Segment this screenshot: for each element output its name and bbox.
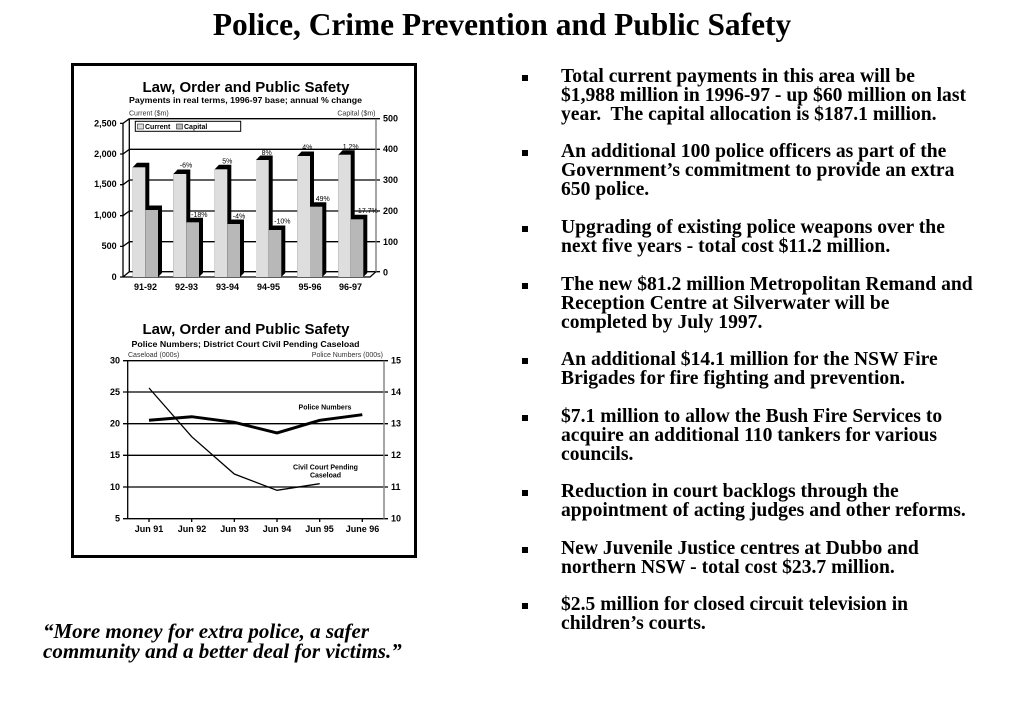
chart heading: Law, Order and Public Safety [142,322,350,338]
date labels: Jun 94 [263,524,291,534]
bullet: police officers: Government’s commitment to provide an extra [561,160,954,181]
bar chart: payments in real terms [94,80,398,292]
right axis labels: 11 [391,482,401,492]
bullet: police weapons [522,217,945,257]
legend: Capital [184,124,207,131]
percent change labels: -17.7% [356,208,378,215]
right axis labels: 300 [383,175,398,185]
left axis labels: 2,500 [94,118,117,128]
bullet: fire brigades [522,349,938,389]
chart heading [132,322,360,349]
year labels: 95-96 [298,282,322,292]
right axis labels: 100 [383,237,398,247]
year labels: 92-93 [175,282,198,292]
chart heading: Payments in real terms, 1996-97 base; annual % change [129,95,362,105]
quote: community and a better deal for victims.” [43,638,402,662]
bullet: current payments: year. The capital allocation is $187.1 million. [561,104,937,125]
left axis labels: 15 [110,450,120,460]
year labels [134,282,362,292]
quote [43,619,402,662]
series labels: Police Numbers [299,404,352,412]
percent change labels: 49% [316,196,330,203]
line: civil court pending caseload [149,388,320,490]
bullet: fire brigades: An additional $14.1 million for the NSW Fire [561,349,938,370]
left axis labels: 1,000 [94,210,117,220]
bullet: bush fire services: $7.1 million to allow the Bush Fire Services to [561,406,942,427]
bars [133,150,367,277]
bullet: juvenile justice [522,538,919,578]
axis titles: Capital ($m) [337,110,376,118]
line chart: police numbers and caseload [110,322,401,534]
line: police numbers [149,415,362,433]
bullet: juvenile justice: New Juvenile Justice centres at Dubbo and [561,538,919,559]
bullet: remand centre: Reception Centre at Silverwater will be [561,293,889,314]
chart heading: Police Numbers; District Court Civil Pending Caseload [132,339,360,349]
right axis labels: 13 [391,419,401,429]
bullet: court backlogs: appointment of acting judges and other reforms. [561,500,966,521]
percent change labels: 1.2% [343,144,359,151]
axis titles: Police Numbers (000s) [312,352,383,359]
legend [135,121,241,131]
chart heading: Law, Order and Public Safety [142,80,350,96]
bullet: closed circuit television: children’s courts. [561,613,706,634]
left axis labels: 20 [110,419,120,429]
bullet: current payments: $1,988 million in 1996-97 - up $60 million on last [561,85,966,106]
year labels: 91-92 [134,282,157,292]
axis titles: Current ($m) [129,110,169,118]
date labels: Jun 93 [220,524,249,534]
bullet: bush fire services: councils. [561,444,633,465]
bullet: bush fire services [522,406,942,465]
series labels: Caseload [310,472,341,480]
left axis labels: 500 [102,241,117,251]
bullet: remand centre [522,274,973,333]
bullet: police officers [522,141,954,200]
percent change labels [180,144,378,226]
bullet: court backlogs [522,481,966,521]
percent change labels: 8% [262,150,272,157]
axis titles [129,110,376,118]
left axis labels: 0 [112,272,117,282]
bullet: juvenile justice: northern NSW - total cost $23.7 million. [561,557,895,578]
bullet: police weapons: next five years - total cost $11.2 million. [561,236,890,257]
percent change labels: -10% [274,219,290,226]
right axis labels: 10 [391,514,401,524]
right axis labels: 0 [383,268,388,278]
plot grid [120,119,380,277]
bullet: remand centre: completed by July 1997. [561,312,762,333]
axis titles [128,352,383,359]
right axis labels: 12 [391,450,401,460]
left axis labels: 10 [110,482,120,492]
right axis labels: 14 [391,387,401,397]
left axis labels [94,118,117,282]
year labels: 96-97 [339,282,362,292]
percent change labels: 5% [222,158,232,165]
year labels: 93-94 [216,282,239,292]
bullet: current payments: Total current payments in this area will be [561,66,915,87]
quote: “More money for extra police, a safer [43,619,369,643]
percent change labels: -4% [233,214,245,221]
percent change labels: -18% [191,212,207,219]
bullet: current payments [522,66,966,125]
axis titles: Caseload (000s) [128,352,179,359]
bullet: closed circuit television [522,594,908,634]
series labels [293,404,358,480]
title: Police, Crime Prevention and Public Safety [213,7,791,42]
left axis labels [110,356,120,524]
left axis labels: 25 [110,387,120,397]
bullet: closed circuit television: $2.5 million for closed circuit television in [561,594,908,615]
date labels: June 96 [346,524,379,534]
left axis labels: 1,500 [94,179,117,189]
right axis labels: 400 [383,144,398,154]
left axis labels: 30 [110,356,120,366]
plot grid and axes [123,361,388,522]
date labels [135,524,379,534]
left axis labels: 2,000 [94,149,117,159]
legend: Current [145,124,171,131]
chart heading [129,80,362,105]
right axis labels [383,114,398,278]
panel: charts frame [71,63,417,558]
bullet: court backlogs: Reduction in court backlogs through the [561,481,899,502]
bullet: bush fire services: acquire an additional 110 tankers for various [561,425,937,446]
right axis labels: 15 [391,356,401,366]
bullet: police officers: An additional 100 police officers as part of the [561,141,946,162]
date labels: Jun 95 [305,524,334,534]
series labels: Civil Court Pending [293,464,358,472]
bullet: police officers: 650 police. [561,179,649,200]
right axis labels: 200 [383,206,398,216]
left axis labels: 5 [115,514,120,524]
year labels: 94-95 [257,282,280,292]
percent change labels: -6% [180,162,192,170]
date labels: Jun 91 [135,524,163,534]
bullet: fire brigades: Brigades for fire fighting and prevention. [561,368,905,389]
right axis labels [391,356,401,524]
percent change labels: 4% [302,144,312,151]
right axis labels: 500 [383,114,398,124]
date labels: Jun 92 [178,524,206,534]
bullet: police weapons: Upgrading of existing police weapons over the [561,217,945,238]
bullet: remand centre: The new $81.2 million Metropolitan Remand and [561,274,973,295]
